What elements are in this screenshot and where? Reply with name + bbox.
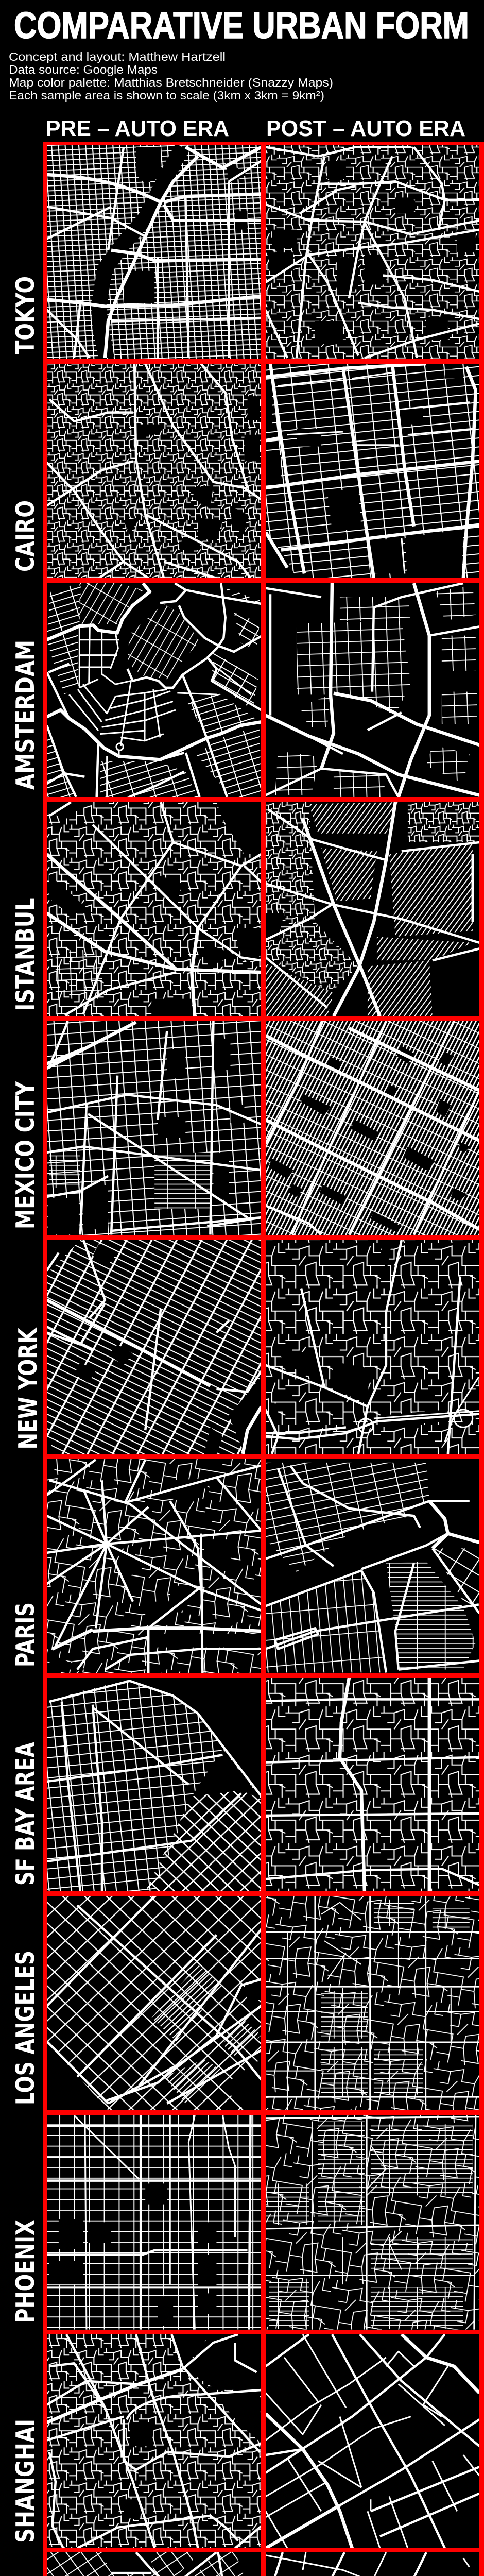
map: New York post-auto — [266, 1240, 479, 1454]
credits: Concept and layout: Matthew Hartzell — [9, 50, 226, 63]
panel: SF Bay Area — [11, 1678, 479, 1891]
label: New York: NEW YORK — [13, 1327, 43, 1449]
panel: Tianjin — [47, 2552, 479, 2576]
panel: Shanghai — [11, 2334, 479, 2548]
label: Phoenix: PHOENIX — [11, 2219, 40, 2324]
label: Cairo: CAIRO — [11, 500, 40, 572]
label: Mexico City: MEXICO CITY — [11, 1081, 40, 1229]
label: Paris: PARIS — [11, 1602, 40, 1667]
map: Los Angeles post-auto — [266, 1896, 479, 2110]
map: Tianjin pre-auto — [47, 2552, 261, 2576]
map: Mexico City pre-auto — [47, 1021, 261, 1235]
map: Shanghai post-auto — [266, 2334, 479, 2548]
label: Tianjin — [0, 2552, 43, 2576]
header text — [9, 5, 469, 141]
map: SF Bay Area pre-auto — [47, 1678, 261, 1891]
map: Istanbul post-auto — [266, 802, 479, 1016]
label: Shanghai: SHANGHAI — [11, 2419, 40, 2543]
map: Paris post-auto — [266, 1459, 479, 1673]
map: Los Angeles pre-auto — [47, 1896, 261, 2110]
map: Istanbul pre-auto — [47, 802, 261, 1016]
panel: Amsterdam — [11, 583, 479, 797]
map: Phoenix pre-auto — [47, 2115, 261, 2330]
column heading: pre-auto era: PRE – AUTO ERA — [46, 116, 229, 141]
map: Tokyo post-auto — [266, 145, 479, 359]
label: Amsterdam: AMSTERDAM — [11, 640, 40, 790]
column heading: post-auto era: POST – AUTO ERA — [266, 116, 465, 141]
label: Los Angeles: LOS ANGELES — [11, 1951, 40, 2105]
credits: Data source: Google Maps — [9, 63, 158, 76]
panel: Cairo — [11, 364, 479, 578]
panel: Istanbul — [11, 802, 479, 1016]
map: Amsterdam post-auto — [266, 583, 479, 797]
panel: Mexico City — [11, 1021, 479, 1235]
panel: Phoenix — [11, 2115, 479, 2330]
panel: Paris — [11, 1459, 479, 1673]
credits: Each sample area is shown to scale (3km x 3km = 9km²) — [9, 89, 324, 102]
panel: Tokyo — [11, 145, 479, 359]
map: Shanghai pre-auto — [47, 2334, 261, 2548]
map: Paris pre-auto — [47, 1459, 261, 1673]
map: Mexico City post-auto — [266, 1021, 479, 1235]
map: Cairo post-auto — [266, 364, 479, 578]
map: New York pre-auto — [47, 1240, 261, 1454]
label: Tokyo: TOKYO — [11, 276, 40, 354]
label: Istanbul: ISTANBUL — [11, 897, 40, 1011]
map: Amsterdam pre-auto — [47, 583, 261, 797]
credits — [9, 50, 333, 102]
map: Cairo pre-auto — [47, 364, 261, 578]
label: SF Bay Area: SF BAY AREA — [11, 1742, 40, 1886]
map: SF Bay Area post-auto — [266, 1678, 479, 1891]
map: Phoenix post-auto — [266, 2115, 479, 2330]
panel: Los Angeles — [11, 1896, 479, 2110]
panel: New York — [13, 1240, 479, 1454]
map: Tokyo pre-auto — [47, 145, 261, 359]
map: Tianjin post-auto — [266, 2552, 479, 2576]
credits: Map color palette: Matthias Bretschneider (Snazzy Maps) — [9, 76, 333, 89]
